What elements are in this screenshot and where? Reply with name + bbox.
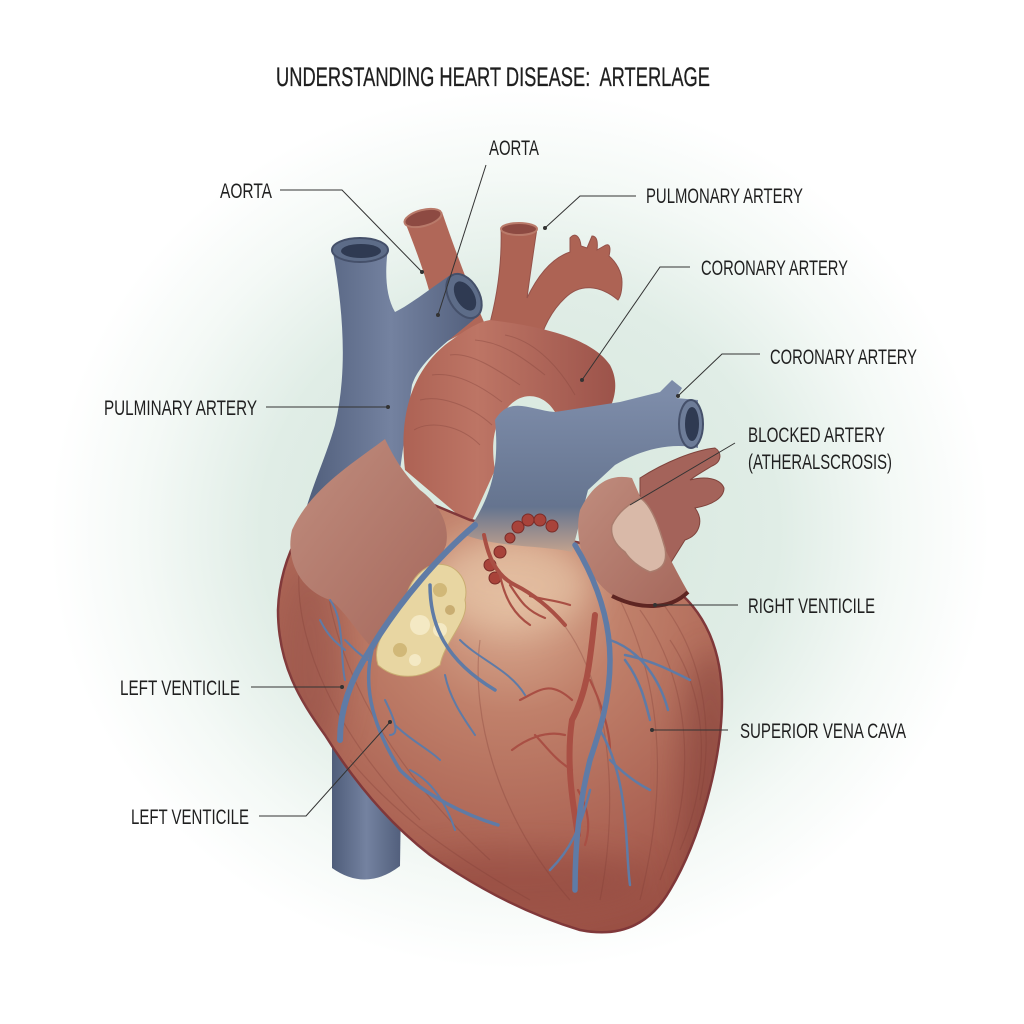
label: superior vena cava bbox=[650, 720, 906, 743]
label: left venticile 1: LEFT VENTICILE bbox=[120, 677, 240, 700]
label: coronary artery 2: CORONARY ARTERY bbox=[770, 346, 917, 369]
label: pulmonary artery top bbox=[543, 185, 803, 230]
label: pulminary artery: PULMINARY ARTERY bbox=[104, 397, 257, 420]
label: right venticile: RIGHT VENTICILE bbox=[748, 595, 875, 618]
label: blocked artery bbox=[630, 424, 892, 505]
vessel: aortic arch bbox=[403, 320, 615, 525]
labels and leader lines bbox=[104, 137, 917, 829]
heart body bbox=[276, 504, 724, 934]
label: coronary artery 1 bbox=[580, 257, 848, 382]
heart illustration bbox=[275, 205, 740, 932]
label: aorta left bbox=[220, 180, 424, 274]
title: UNDERSTANDING HEART DISEASE: ARTERLAGE bbox=[276, 62, 710, 92]
label: superior vena cava: SUPERIOR VENA CAVA bbox=[740, 720, 906, 743]
vessel: lower vena cava bbox=[332, 720, 401, 880]
label: left venticile 2 bbox=[131, 720, 392, 829]
label: right venticile bbox=[653, 595, 875, 618]
label: aorta left: AORTA bbox=[220, 180, 272, 203]
right ventricle flap bbox=[578, 477, 688, 607]
coronary veins blue bbox=[320, 525, 690, 890]
plaque deposit bbox=[376, 564, 466, 676]
label: left venticile 2: LEFT VENTICILE bbox=[131, 806, 249, 829]
right atrium appendage (back) bbox=[640, 448, 724, 580]
label: pulmonary artery top: PULMONARY ARTERY bbox=[646, 185, 803, 208]
vessel: blue superior trunk bbox=[465, 380, 703, 552]
vessel: red pulmonary stubs bbox=[403, 205, 622, 350]
label: blocked artery: BLOCKED ARTERY bbox=[748, 424, 885, 447]
label: coronary artery 2 bbox=[676, 346, 917, 398]
label: aorta top: AORTA bbox=[489, 137, 539, 160]
coronary arteries red bbox=[484, 535, 610, 845]
label: blocked artery: (ATHERALSCROSIS) bbox=[748, 451, 892, 474]
label: aorta top bbox=[436, 137, 539, 317]
blocked artery cluster bbox=[484, 514, 558, 584]
left atrium bbox=[290, 439, 447, 650]
vessel: upper left blue vein bbox=[303, 238, 489, 520]
label: coronary artery 1: CORONARY ARTERY bbox=[701, 257, 848, 280]
